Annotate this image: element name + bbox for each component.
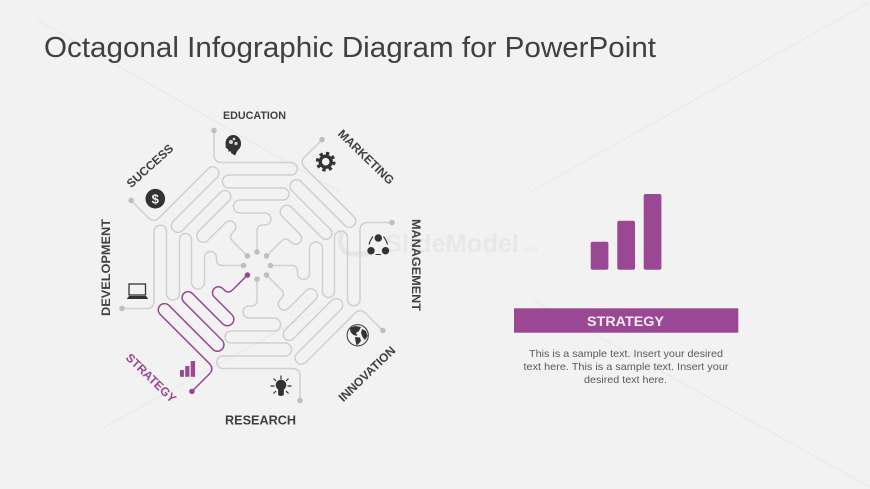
trace: success: [127, 140, 278, 290]
label: education: EDUCATION: [223, 110, 286, 122]
label: development: DEVELOPMENT: [99, 218, 113, 316]
watermark: .com: [520, 245, 538, 254]
icon: marketing gear: [317, 153, 334, 170]
title: Octagonal Infographic Diagram for PowerPoint: [44, 32, 656, 64]
icon: success dollar: $: [152, 192, 160, 206]
octagonal maze diagram: [119, 128, 395, 403]
label: strategy: STRATEGY: [123, 351, 179, 405]
trace: education: [211, 128, 297, 255]
trace: strategy (highlighted): [131, 245, 282, 395]
icon: research light bulb: [270, 376, 292, 396]
label: success: SUCCESS: [124, 141, 176, 191]
description text: desired text here.: [584, 374, 667, 386]
trace: marketing: [232, 136, 383, 286]
icon: education head: [226, 135, 241, 156]
watermark: SlideModel: [385, 230, 519, 258]
trace: development: [119, 225, 246, 311]
label: marketing: MARKETING: [335, 127, 397, 187]
trace: innovation: [236, 241, 387, 391]
label: innovation: INNOVATION: [336, 343, 398, 405]
icon: success dollar: [146, 189, 165, 208]
watermark: [340, 230, 538, 258]
description text: This is a sample text. Insert your desired: [529, 348, 723, 360]
trace: management: [268, 220, 395, 306]
trace: research: [217, 276, 303, 403]
description text: text here. This is a sample text. Insert your: [524, 361, 729, 373]
icon: innovation globe: [347, 325, 368, 346]
label: management: MANAGEMENT: [409, 219, 423, 312]
icon: management triad: [367, 234, 389, 254]
banner: strategy: STRATEGY: [587, 314, 664, 329]
banner: strategy: [514, 308, 738, 333]
label: research: RESEARCH: [225, 414, 296, 428]
description text: [524, 348, 729, 386]
icon: development laptop: [127, 284, 148, 299]
large icon: strategy bars: [591, 194, 661, 270]
icon: strategy bars: [180, 361, 195, 377]
